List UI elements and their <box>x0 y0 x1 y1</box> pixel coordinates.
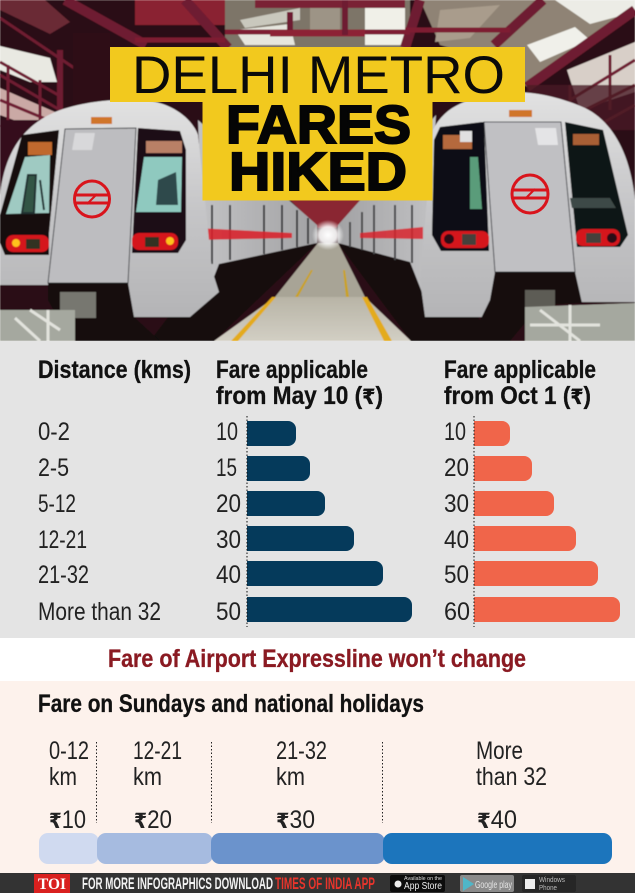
column headings <box>38 356 596 410</box>
bar chart: fares from Oct 1: 60 <box>444 598 470 626</box>
bar chart: fares from May 10 <box>216 416 412 627</box>
app store badge: Available on the <box>404 876 442 882</box>
cab windows <box>0 130 59 255</box>
segmented fare bar <box>39 833 612 864</box>
google play badge <box>460 875 514 892</box>
bar chart: fares from May 10: 20 <box>216 490 241 518</box>
app store badge <box>390 875 445 892</box>
distance labels: 2-5 <box>38 454 69 482</box>
fare values: ₹40 <box>477 806 517 834</box>
distance labels <box>38 418 161 626</box>
fare values: ₹30 <box>276 806 315 834</box>
column headings: Fare applicable <box>216 356 368 384</box>
distance band labels: km <box>49 763 77 791</box>
windows phone badge: Windows <box>539 877 565 884</box>
column headings: Fare applicable <box>444 356 596 384</box>
windows phone badge <box>522 875 576 892</box>
fare values <box>49 806 517 834</box>
distance band labels: km <box>133 763 162 791</box>
bar chart: fares from Oct 1: 20 <box>444 454 469 482</box>
coupler <box>48 283 160 341</box>
bar chart: fares from Oct 1: 30 <box>444 490 469 518</box>
callout: airport express line <box>0 638 635 681</box>
windows phone badge: Phone <box>539 885 557 892</box>
tunnel light glow <box>312 220 344 250</box>
distance labels: 0-2 <box>38 418 70 446</box>
app store badge: App Store <box>404 881 442 892</box>
title: HIKED <box>229 142 407 202</box>
TOI logo: TOI <box>38 876 66 893</box>
title: FARES <box>226 95 411 155</box>
bar chart: fares from May 10: 15 <box>216 454 237 482</box>
google play badge: Google play <box>475 880 512 891</box>
photo: metro trains in depot <box>0 0 635 341</box>
distance band labels: 21-32 <box>276 737 327 765</box>
fare values: ₹20 <box>134 806 172 834</box>
metro logo left <box>74 181 110 217</box>
column headings: from May 10 (₹) <box>216 382 383 410</box>
footer message: FOR MORE INFOGRAPHICS DOWNLOAD <box>82 874 273 893</box>
column headings: Distance (kms) <box>38 356 191 384</box>
distance labels: 5-12 <box>38 490 76 518</box>
bar chart: fares from Oct 1: 40 <box>444 526 469 554</box>
distance band labels: 0-12 <box>49 737 89 765</box>
ceiling skylights <box>0 0 635 135</box>
bar chart: fares from Oct 1: 10 <box>444 418 466 446</box>
callout: airport express line: Fare of Airport Expressline won’t change <box>108 645 526 673</box>
bar chart: fares from May 10: 30 <box>216 526 241 554</box>
footer message highlight: TIMES OF INDIA APP <box>275 874 375 893</box>
bar chart: fares from Oct 1 <box>444 416 620 627</box>
left train <box>0 100 317 341</box>
centre tunnel ceiling and platform <box>290 200 362 228</box>
footer <box>0 873 635 893</box>
column headings: from Oct 1 (₹) <box>444 382 591 410</box>
panel: fare table <box>0 341 635 638</box>
distance labels: More than 32 <box>38 598 161 626</box>
bar chart: fares from May 10: 50 <box>216 598 241 626</box>
distance band labels: km <box>276 763 305 791</box>
panel: Sunday and holiday fares <box>0 681 635 873</box>
distance band labels: 12-21 <box>133 737 182 765</box>
panel heading: Fare on Sundays and national holidays <box>38 690 424 718</box>
bar chart: fares from Oct 1: 50 <box>444 561 469 589</box>
title: DELHI METRO <box>132 46 505 105</box>
metro logo right <box>512 175 548 213</box>
distance band labels: than 32 <box>476 763 547 791</box>
distance labels: 12-21 <box>38 526 87 554</box>
red light clusters <box>6 235 49 252</box>
distance band labels <box>49 737 547 791</box>
right train <box>338 92 635 341</box>
bar chart: fares from May 10: 10 <box>216 418 238 446</box>
fare values: ₹10 <box>49 806 86 834</box>
distance labels: 21-32 <box>38 561 89 589</box>
bar chart: fares from May 10: 40 <box>216 561 241 589</box>
title <box>110 46 525 202</box>
ceiling beams <box>0 0 635 150</box>
distance band labels: More <box>476 737 523 765</box>
